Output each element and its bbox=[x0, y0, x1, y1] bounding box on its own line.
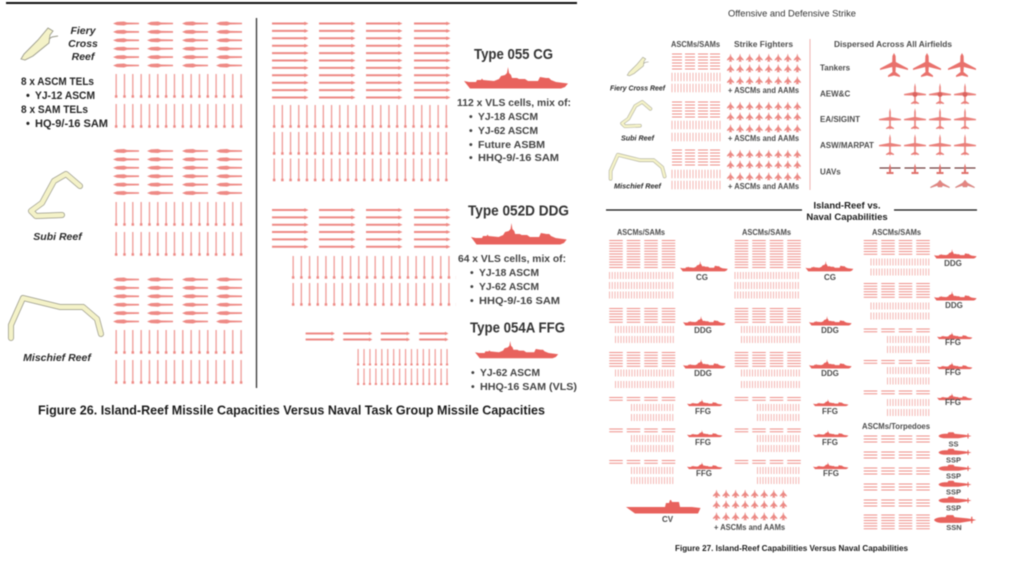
text: Type 055 loadout: YJ-18 ASCM bbox=[478, 111, 538, 123]
icon: Fiery Cross Reef small bbox=[627, 57, 649, 76]
icon: Subi Reef small bbox=[622, 102, 650, 126]
text: Type 054A loadout bbox=[471, 367, 577, 393]
text: Type 055 loadout bbox=[457, 97, 571, 164]
text: Type 054A loadout: YJ-62 ASCM bbox=[480, 367, 540, 379]
fighters: Fiery Cross bbox=[727, 54, 801, 95]
task group column 1 bbox=[609, 228, 728, 480]
fighters: Subi bbox=[727, 102, 801, 143]
aircraft: AEW&C bbox=[820, 83, 976, 105]
reef group: Mischief bbox=[11, 278, 249, 382]
ship group: Type 052D DDG bbox=[272, 202, 569, 307]
fighters: carrier air wing bbox=[713, 490, 787, 532]
ships and labels: DDG bbox=[944, 259, 962, 268]
aircraft: UAVs bbox=[820, 164, 976, 188]
reef row: Mischief bbox=[611, 150, 801, 191]
missiles bbox=[734, 240, 801, 480]
icon: Subi Reef outline bbox=[31, 174, 80, 216]
text: Type 052D loadout: HHQ-9/-16 SAM bbox=[479, 295, 560, 307]
submarines and labels: SS bbox=[948, 440, 959, 448]
reef group: Subi bbox=[31, 149, 249, 254]
ships and labels: DDG bbox=[945, 301, 963, 310]
panel: Figure 26 island-reef vs naval task group missiles bbox=[6, 3, 577, 418]
aircraft: AEW&C: AEW&C bbox=[820, 90, 850, 98]
ships and labels bbox=[934, 249, 977, 407]
fighters: Mischief bbox=[727, 150, 801, 191]
label: Mischief Reef small: Mischief Reef bbox=[614, 182, 662, 190]
rule right of heading bbox=[894, 209, 977, 211]
ships and labels: FFG bbox=[823, 469, 839, 478]
text: Type 052D loadout: 64 x VLS cells, mix of: bbox=[458, 253, 566, 265]
submarines and labels: SSP bbox=[946, 504, 961, 512]
text: Type 055 loadout: • bbox=[469, 152, 473, 164]
label: Fiery Cross Reef small: Fiery Cross Reef bbox=[610, 84, 666, 92]
label: CV: CV bbox=[662, 515, 674, 524]
heading: Island-Reef vs. Naval Capabilities: Naval Capabilities bbox=[806, 212, 888, 223]
missiles bbox=[870, 240, 931, 412]
heading: Type 055 CG: Type 055 CG bbox=[474, 46, 553, 63]
missiles small: Fiery Cross bbox=[672, 54, 720, 88]
heading: Type 052D DDG: Type 052D DDG bbox=[468, 202, 569, 220]
ships and labels bbox=[680, 261, 728, 478]
submarines and labels bbox=[934, 432, 976, 532]
submarine group bbox=[862, 422, 976, 532]
column headers bbox=[671, 40, 953, 49]
text: Fiery Cross Reef loadout bbox=[21, 76, 108, 130]
missiles small: Mischief bbox=[672, 150, 720, 185]
ships and labels bbox=[806, 261, 853, 478]
reef row: Subi bbox=[621, 102, 801, 143]
icon: Mischief Reef outline bbox=[11, 298, 101, 338]
column headers: Strike Fighters bbox=[734, 40, 794, 49]
task group column 3 bbox=[870, 228, 977, 412]
missiles: Subi Reef bbox=[113, 149, 249, 254]
missiles: Type 055 bbox=[272, 22, 454, 180]
icon: carrier bbox=[626, 500, 700, 514]
header: ASCMs/SAMs bbox=[617, 228, 666, 237]
ships and labels: FFG bbox=[695, 438, 711, 447]
submarines and labels: SSP bbox=[946, 488, 961, 496]
icon: Type 052D ship bbox=[471, 223, 567, 244]
label: Subi Reef small: Subi Reef bbox=[621, 134, 655, 142]
text: Type 055 loadout: Future ASBM bbox=[478, 139, 545, 151]
heading: Type 054A FFG: Type 054A FFG bbox=[470, 320, 565, 336]
text: Type 052D loadout bbox=[458, 253, 566, 307]
text: Type 054A loadout: HHQ-16 SAM (VLS) bbox=[480, 381, 577, 393]
divider: reefs vs ships bbox=[256, 18, 258, 388]
task group column 2 bbox=[734, 228, 853, 480]
text: Type 055 loadout: • bbox=[469, 111, 473, 123]
divider: airfields bbox=[809, 39, 811, 190]
label: Fiery Cross Reef: Cross bbox=[68, 38, 98, 50]
header: ASCMs/SAMs bbox=[742, 228, 792, 237]
missiles and torpedoes bbox=[870, 436, 923, 530]
text: Type 055 loadout: • bbox=[469, 139, 473, 151]
column headers: ASCMs/SAMs bbox=[671, 40, 721, 49]
text: Fiery Cross Reef loadout: 8 x SAM TELs bbox=[21, 104, 88, 116]
ships and labels: FFG bbox=[696, 469, 712, 478]
submarines and labels: SSP bbox=[946, 472, 961, 480]
reef group: Fiery Cross bbox=[21, 22, 249, 130]
missiles: Mischief Reef bbox=[113, 278, 249, 382]
ships and labels: DDG bbox=[821, 369, 839, 378]
aircraft: UAVs: UAVs bbox=[820, 168, 841, 176]
ships and labels: FFG bbox=[945, 368, 961, 377]
text: Type 055 loadout: • bbox=[469, 125, 473, 137]
aircraft: ASW/MARPAT bbox=[820, 134, 976, 156]
panel: Figure 27 island-reef vs naval capabilities bbox=[606, 8, 977, 553]
aircraft: ASW/MARPAT: ASW/MARPAT bbox=[820, 141, 874, 150]
fighters: carrier air wing: + ASCMs and AAMs bbox=[714, 523, 786, 532]
text: Type 055 loadout: YJ-62 ASCM bbox=[478, 125, 538, 137]
text: Type 052D loadout: • bbox=[470, 295, 474, 307]
missiles: Fiery Cross Reef bbox=[113, 22, 249, 126]
ships and labels: FFG bbox=[945, 338, 961, 347]
ships and labels: DDG bbox=[694, 369, 712, 378]
heading: Island-Reef vs. Naval Capabilities bbox=[806, 200, 888, 223]
title: Offensive and Defensive Strike: Offensive and Defensive Strike bbox=[728, 8, 856, 18]
label: Fiery Cross Reef bbox=[68, 25, 98, 63]
carrier group: CV bbox=[626, 490, 787, 532]
icon: Mischief Reef small bbox=[611, 155, 665, 179]
icon: Type 054A ship bbox=[475, 341, 558, 358]
ships and labels: DDG bbox=[694, 326, 712, 335]
text: Type 052D loadout: • bbox=[470, 281, 474, 293]
header: ASCMs/SAMs bbox=[872, 228, 922, 237]
heading: Island-Reef vs. Naval Capabilities: Island-Reef vs. bbox=[813, 200, 881, 212]
ships and labels: DDG bbox=[821, 326, 839, 335]
top rule bbox=[6, 2, 577, 4]
label: Fiery Cross Reef: Reef bbox=[72, 51, 96, 63]
submarines and labels: SSP bbox=[946, 456, 961, 464]
text: Fiery Cross Reef loadout: HQ-9/-16 SAM bbox=[35, 118, 108, 130]
text: Fiery Cross Reef loadout: • bbox=[26, 90, 30, 102]
column headers: Dispersed Across All Airfields bbox=[834, 40, 953, 49]
ships and labels: CG bbox=[824, 273, 836, 282]
label: Subi Reef: Subi Reef bbox=[33, 231, 83, 243]
aircraft: EA/SIGINT: EA/SIGINT bbox=[820, 115, 860, 124]
aircraft: Tankers: Tankers bbox=[820, 64, 851, 72]
icon: Fiery Cross Reef outline bbox=[21, 28, 58, 60]
ships and labels: FFG bbox=[822, 438, 838, 447]
text: Type 055 loadout: 112 x VLS cells, mix of: bbox=[457, 97, 571, 109]
ships and labels: FFG bbox=[945, 398, 961, 407]
submarines and labels: SSN bbox=[946, 523, 962, 532]
ships and labels: FFG bbox=[822, 407, 838, 416]
label: Fiery Cross Reef: Fiery bbox=[70, 25, 97, 37]
text: Type 052D loadout: YJ-62 ASCM bbox=[479, 281, 539, 293]
fighters: Subi: + ASCMs and AAMs bbox=[728, 134, 800, 143]
icon: Type 055 ship bbox=[464, 67, 568, 88]
ship group: Type 054A FFG bbox=[306, 320, 577, 393]
text: Type 054A loadout: • bbox=[471, 367, 475, 379]
text: Type 055 loadout: HHQ-9/-16 SAM bbox=[478, 152, 559, 164]
header: ASCMs/Torpedoes: ASCMs/Torpedoes bbox=[862, 422, 931, 431]
reef row: Fiery Cross bbox=[610, 54, 801, 95]
ships and labels: FFG bbox=[695, 407, 711, 416]
aircraft: Tankers bbox=[820, 53, 976, 77]
text: Fiery Cross Reef loadout: YJ-12 ASCM bbox=[35, 90, 95, 102]
missiles bbox=[609, 240, 675, 480]
caption: Figure 27: Figure 27. Island-Reef Capabilities Versus Naval Capabilities bbox=[675, 544, 909, 553]
missiles small: Subi bbox=[672, 102, 720, 137]
text: Type 054A loadout: • bbox=[471, 381, 475, 393]
text: Type 052D loadout: • bbox=[470, 267, 474, 279]
caption: Figure 26: Figure 26. Island-Reef Missile Capacities Versus Naval Task Group Missile Capacities bbox=[38, 404, 545, 418]
fighters: Mischief: + ASCMs and AAMs bbox=[728, 182, 800, 191]
text: Type 052D loadout: YJ-18 ASCM bbox=[479, 267, 539, 279]
text: Fiery Cross Reef loadout: 8 x ASCM TELs bbox=[21, 76, 94, 88]
rule left of heading bbox=[606, 209, 802, 211]
text: Fiery Cross Reef loadout: • bbox=[26, 118, 30, 130]
ship group: Type 055 CG bbox=[272, 22, 571, 180]
missiles: Type 052D bbox=[272, 208, 456, 304]
fighters: Fiery Cross: + ASCMs and AAMs bbox=[728, 86, 800, 95]
aircraft: EA/SIGINT bbox=[820, 108, 976, 130]
label: Mischief Reef: Mischief Reef bbox=[23, 352, 92, 364]
ships and labels: CG bbox=[696, 273, 708, 282]
missiles: Type 054A bbox=[306, 332, 450, 384]
